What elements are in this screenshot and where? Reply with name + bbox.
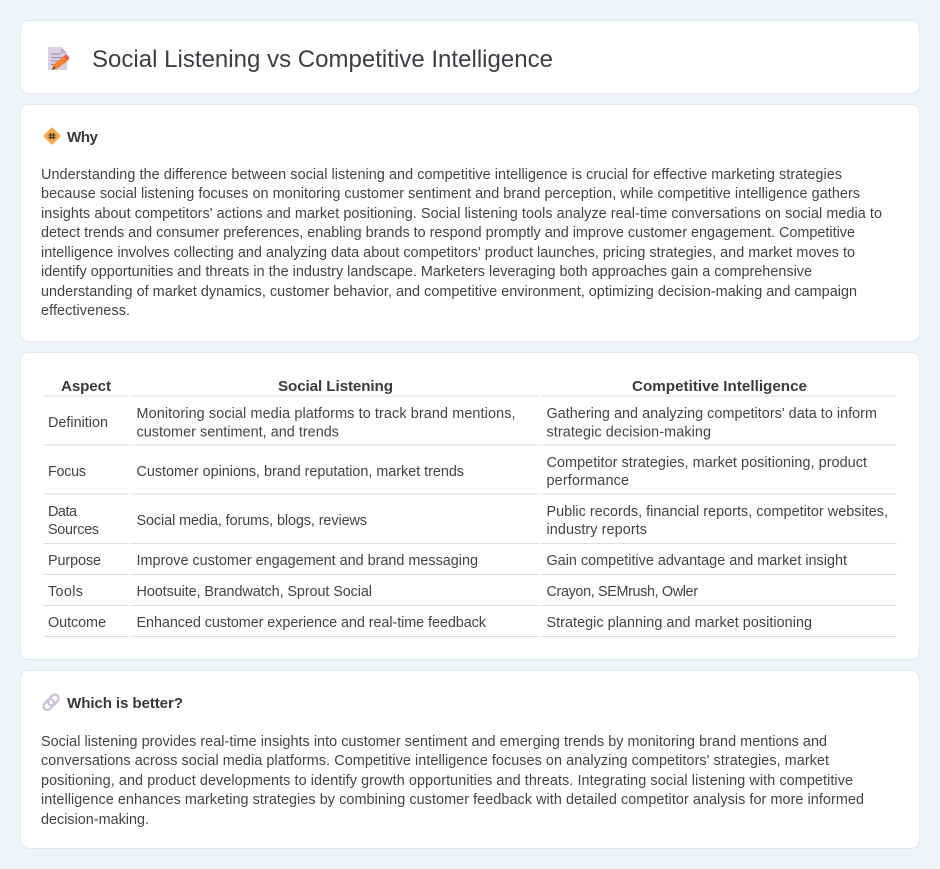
table row: tools: Crayon, SEMrush, Owler bbox=[546, 584, 698, 600]
table row: focus: Customer opinions, brand reputation, market trends bbox=[136, 464, 464, 480]
panel: title header bbox=[20, 20, 920, 94]
panel: why bbox=[20, 104, 920, 342]
table row: definition bbox=[48, 406, 877, 440]
text block: why paragraph: intelligence involves collecting and analyzing data about competitors' product launches, pricing strategies, and market moves to bbox=[41, 245, 855, 261]
table row: tools bbox=[48, 584, 698, 600]
table row: outcome: Outcome bbox=[48, 615, 106, 631]
heading: which is better: Which is better? bbox=[67, 695, 183, 712]
table row: focus: Competitor strategies, market positioning, product bbox=[546, 455, 867, 471]
text block: why paragraph bbox=[41, 167, 882, 319]
table row: purpose: Improve customer engagement and brand messaging bbox=[136, 553, 478, 569]
icon: warning diamond bbox=[44, 128, 60, 144]
panel: which is better bbox=[20, 670, 920, 848]
icon: chain link bbox=[42, 693, 60, 712]
table row: purpose bbox=[48, 553, 847, 569]
table row: data sources: Sources bbox=[48, 522, 99, 538]
table row: definition: customer sentiment, and trends bbox=[136, 424, 339, 440]
table row: definition: Definition bbox=[48, 415, 108, 431]
text block: which is better paragraph: Social listening provides real-time insights into customer sentiment and emerging trends by monitoring brand mentions and bbox=[41, 734, 827, 750]
table header row bbox=[61, 378, 807, 395]
text block: which is better paragraph: positioning, and product developments to identify growth opportunities and threats. Integrating social listening with competitive bbox=[41, 773, 853, 789]
table row: focus: performance bbox=[546, 473, 629, 489]
table row: purpose: Purpose bbox=[48, 553, 101, 569]
table row: data sources bbox=[48, 504, 888, 538]
table row: definition: Gathering and analyzing competitors' data to inform bbox=[546, 406, 877, 422]
table row: tools: Hootsuite, Brandwatch, Sprout Social bbox=[136, 584, 372, 600]
text block: which is better paragraph: conversations across social media platforms. Competitive intelligence focuses on analyzing competitors' strategies, market bbox=[41, 753, 829, 769]
text block: why paragraph: insights about competitors' actions and market positioning. Social listening tools analyze real-time conversations on social media to bbox=[41, 206, 882, 222]
table row: definition: strategic decision-making bbox=[546, 424, 711, 440]
text block: why paragraph: detect trends and consumer preferences, enabling brands to respond promptly and improve customer engagement. Competitive bbox=[41, 225, 855, 241]
text block: why paragraph: identify opportunities and threats in the industry landscape. Marketers leveraging both approaches gain a comprehensive bbox=[41, 264, 812, 280]
table row: data sources: Social media, forums, blogs, reviews bbox=[136, 513, 367, 529]
table row: data sources: Public records, financial reports, competitor websites, bbox=[546, 504, 888, 520]
title: Social Listening vs Competitive Intelligence bbox=[92, 46, 553, 73]
table row: data sources: Data bbox=[48, 504, 77, 520]
heading: why: Why bbox=[67, 129, 99, 146]
table row: definition: Monitoring social media platforms to track brand mentions, bbox=[136, 406, 516, 422]
table row: data sources: industry reports bbox=[546, 522, 647, 538]
text block: why paragraph: effectiveness. bbox=[41, 303, 130, 319]
table header row: Aspect bbox=[61, 378, 111, 395]
text block: which is better paragraph: intelligence enhances marketing strategies by combining customer feedback with detailed competitor analysis for more informed bbox=[41, 792, 864, 808]
table row: tools: Tools bbox=[48, 584, 83, 600]
table row: focus: Focus bbox=[48, 464, 86, 480]
text block: why paragraph: understanding of market dynamics, customer behavior, and competitive environment, optimizing decision-making and campaign bbox=[41, 284, 857, 300]
text block: why paragraph: Understanding the difference between social listening and competitive intelligence is crucial for effective marketing strategies bbox=[41, 167, 842, 183]
table header row: Social Listening bbox=[278, 378, 393, 395]
panel: comparison table bbox=[20, 352, 920, 660]
table row: focus bbox=[48, 455, 867, 489]
text block: which is better paragraph: decision-making. bbox=[41, 812, 149, 828]
text block: why paragraph: because social listening focuses on monitoring customer sentiment and brand perception, while competitive intelligence gathers bbox=[41, 186, 860, 202]
table row: purpose: Gain competitive advantage and market insight bbox=[546, 553, 847, 569]
table row: outcome: Strategic planning and market positioning bbox=[546, 615, 812, 631]
text block: which is better paragraph bbox=[41, 734, 864, 828]
table row: outcome: Enhanced customer experience and real-time feedback bbox=[136, 615, 487, 631]
icon: document with pencil bbox=[48, 47, 70, 70]
table header row: Competitive Intelligence bbox=[632, 378, 807, 395]
table row: outcome bbox=[48, 615, 812, 631]
